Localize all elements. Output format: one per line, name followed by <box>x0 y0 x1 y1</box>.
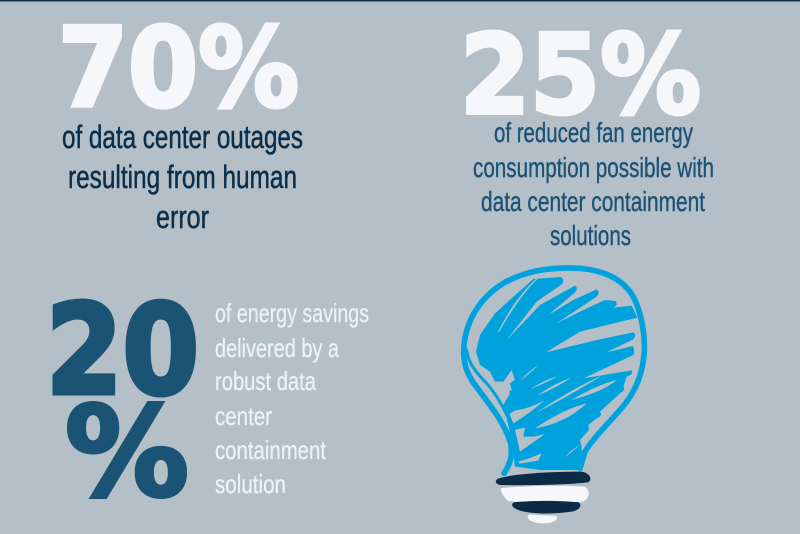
stat: 25 percent <box>460 11 714 251</box>
caption: fan energy: consumption possible with <box>473 152 714 183</box>
caption: human error: error <box>156 199 209 235</box>
inner outline <box>467 350 512 425</box>
bulb outline <box>464 268 644 473</box>
caption: energy savings <box>215 298 369 499</box>
caption: energy savings: containment <box>215 435 327 465</box>
caption: human error <box>62 119 303 235</box>
stat: 70 percent <box>58 4 303 235</box>
caption: energy savings: robust data <box>215 366 316 396</box>
stat: 20 percent <box>46 279 369 525</box>
white thread upper <box>501 486 589 503</box>
caption: energy savings: of energy savings <box>215 298 369 328</box>
caption: fan energy <box>473 117 714 251</box>
number: 70%: 70% <box>58 4 299 132</box>
scribble gaps <box>490 278 617 464</box>
scribble mass <box>476 277 637 470</box>
caption: energy savings: center <box>215 401 272 431</box>
caption: energy savings: solution <box>215 469 286 499</box>
caption: energy savings: delivered by a <box>215 333 339 363</box>
dark thread upper <box>496 472 590 485</box>
white tip <box>528 514 557 523</box>
number: 20: 20 <box>46 279 199 423</box>
bulb base <box>496 472 590 523</box>
icon: scribbled light bulb <box>464 268 644 523</box>
caption: human error: resulting from human <box>68 159 297 195</box>
caption: human error: of data center outages <box>62 119 303 155</box>
dark thread lower <box>512 501 580 513</box>
caption: fan energy: solutions <box>550 220 631 251</box>
number: 25%: 25% <box>460 11 701 139</box>
percent sign: % <box>65 381 189 525</box>
caption: fan energy: data center containment <box>481 186 705 217</box>
caption: fan energy: of reduced fan energy <box>494 117 693 148</box>
top border <box>0 0 800 2</box>
